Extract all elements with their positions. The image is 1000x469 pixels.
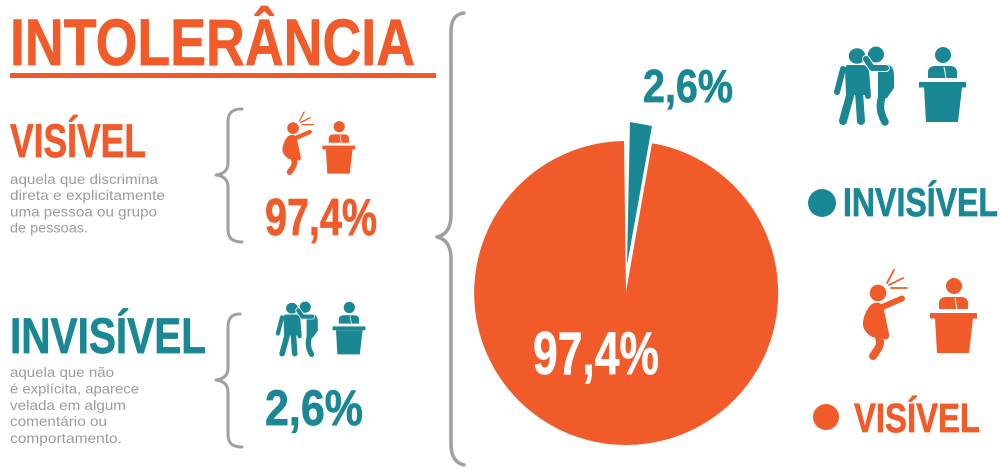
icon: shouting person at podium xyxy=(282,112,355,174)
icon: shouting person at podium xyxy=(863,270,977,356)
label: 2,6%: 2,6% xyxy=(643,60,733,112)
stat: 97,4%: 97,4% xyxy=(265,189,377,247)
legend dot: visível xyxy=(813,404,839,430)
heading: invisível: INVISÍVEL xyxy=(10,308,206,364)
label: 97,4%: 97,4% xyxy=(533,320,659,387)
heading: visível: VISÍVEL xyxy=(10,114,146,167)
text block: visível definition: aquela que discrimina xyxy=(10,171,158,187)
text block: visível definition xyxy=(10,171,165,236)
text block: invisível definition xyxy=(10,364,139,446)
stat: 2,6%: 2,6% xyxy=(265,380,363,436)
brace: invisível xyxy=(216,314,242,447)
text block: visível definition: uma pessoa ou grupo xyxy=(10,204,157,220)
brace: visível xyxy=(216,109,242,242)
legend dot: invisível xyxy=(808,189,836,217)
text block: invisível definition: é explícita, aparece xyxy=(10,380,139,396)
text block: invisível definition: comentário ou xyxy=(10,413,107,429)
pie chart xyxy=(474,60,778,445)
text block: visível definition: direta e explicitamente xyxy=(10,187,165,203)
legend: visível xyxy=(813,270,980,441)
text block: invisível definition: velada em algum xyxy=(10,397,126,413)
icon: whispering people and podium xyxy=(837,46,966,122)
legend: invisível xyxy=(808,46,998,225)
panel: invisível xyxy=(10,302,365,447)
text block: visível definition: de pessoas. xyxy=(10,220,88,236)
slice: visível 97,4% xyxy=(474,141,778,445)
text block: invisível definition: aquela que não xyxy=(10,364,114,380)
text block: invisível definition: comportamento. xyxy=(10,430,122,446)
panel: visível xyxy=(10,109,377,247)
slice: invisível 2,6% xyxy=(627,122,652,265)
title: INTOLERÂNCIA xyxy=(10,5,415,79)
icon: whispering people and podium xyxy=(278,302,365,354)
large brace xyxy=(437,13,464,465)
